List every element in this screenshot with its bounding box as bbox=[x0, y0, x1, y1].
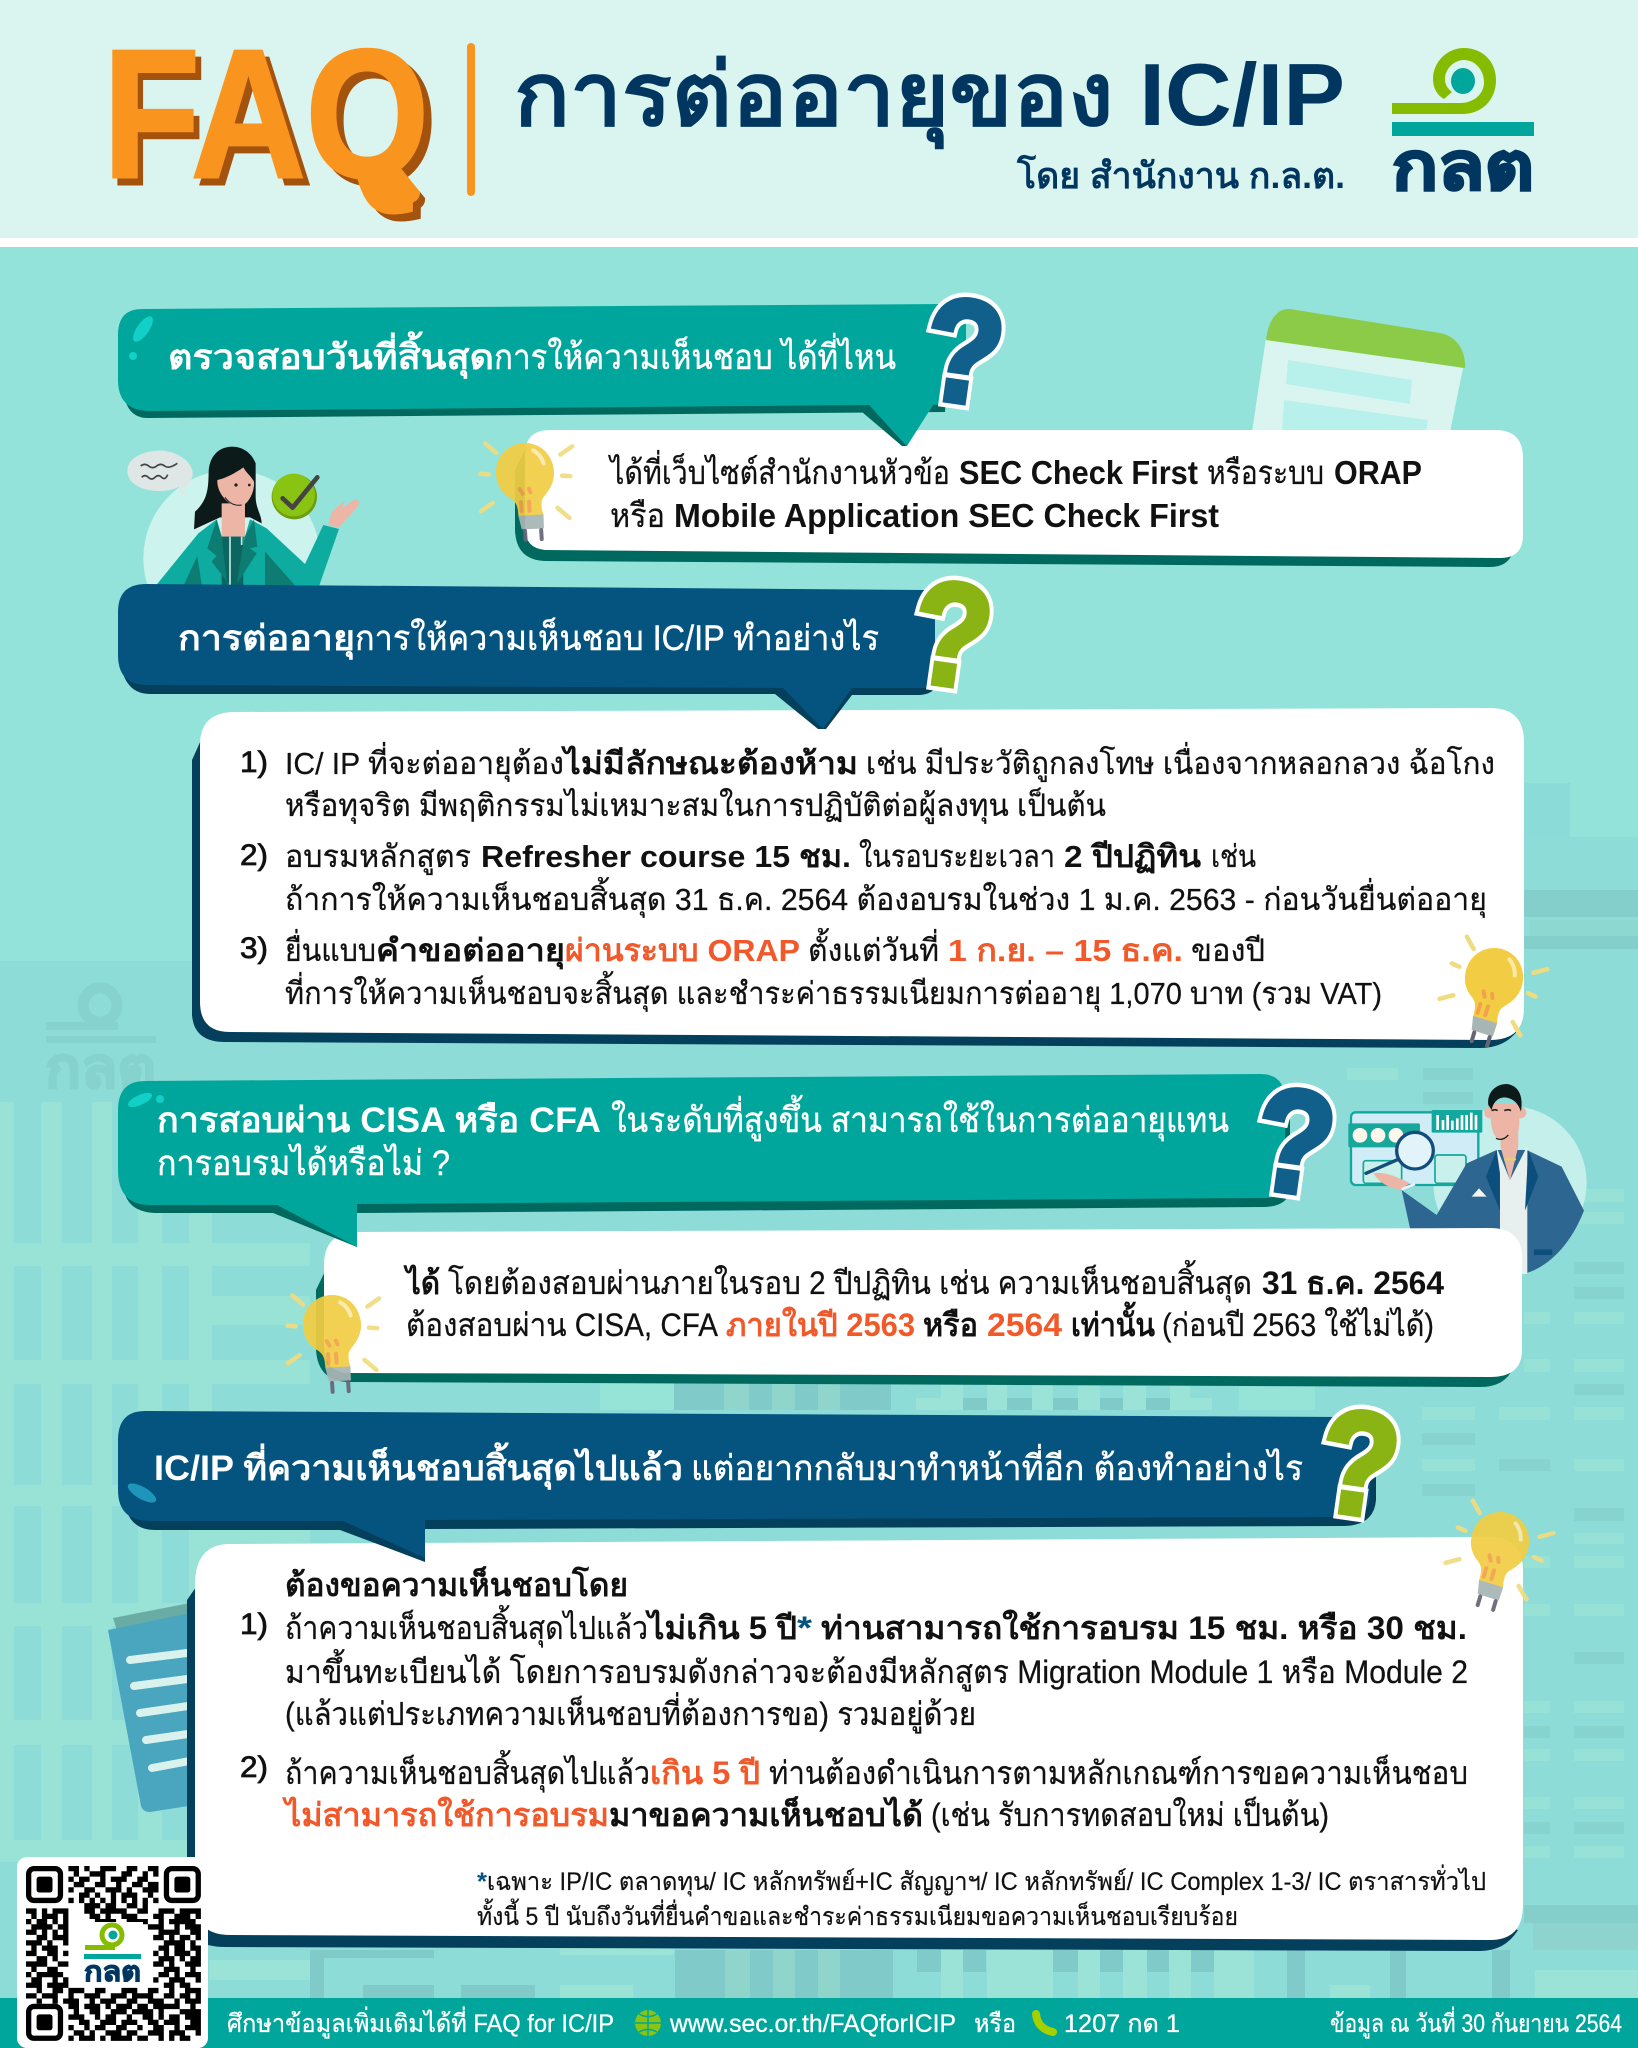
question 1 text: การให้ความเห็นชอบ ได้ที่ไหน bbox=[494, 333, 896, 377]
footer: phone number: 1207 กด 1 bbox=[1064, 2010, 1180, 2038]
step 3 bbox=[240, 928, 1382, 1013]
icon: light bulb bbox=[470, 429, 587, 549]
panel: expired IC/IP answer bbox=[187, 1498, 1556, 1951]
step 2: Refresher course 15 ชม. bbox=[481, 839, 851, 874]
highlight bbox=[129, 313, 157, 360]
answer 3 line 2: ต้องสอบผ่าน CISA, CFA bbox=[406, 1307, 719, 1343]
icon: question mark 4: ? bbox=[1309, 1377, 1409, 1550]
question 1 text: ตรวจสอบวันที่สิ้นสุด bbox=[168, 331, 494, 379]
header band bbox=[0, 0, 1638, 238]
icon: light bulb bbox=[1439, 1498, 1556, 1618]
case 2: 2) bbox=[240, 1751, 268, 1784]
QR centre logo: กลต bbox=[84, 1956, 141, 1987]
answer 3 line 2: (ก่อนปี 2563 ใช้ไม่ได้) bbox=[1162, 1307, 1434, 1343]
step 2: อบรมหลักสูตร bbox=[285, 839, 471, 875]
icon: question mark 2: ? bbox=[902, 548, 1002, 721]
step 2: ถ้าการให้ความเห็นชอบสิ้นสุด 31 ธ.ค. 2564 ต้องอบรมในช่วง 1 ม.ค. 2563 - ก่อนวันยื่นต่ออายุ bbox=[285, 877, 1487, 919]
answer 3 line 1: โดยต้องสอบผ่านภายในรอบ 2 ปีปฏิทิน เช่น ความเห็นชอบสิ้นสุด bbox=[448, 1260, 1252, 1303]
footnote bbox=[477, 1864, 1486, 1931]
title divider bbox=[467, 43, 475, 196]
step 1: ไม่มีลักษณะต้องห้าม bbox=[561, 745, 858, 781]
icon: light bulb bbox=[277, 1281, 394, 1401]
answer 1 line 1: SEC Check First bbox=[959, 454, 1198, 491]
case 1: 1) bbox=[240, 1608, 268, 1641]
case 1: ท่านสามารถใช้การอบรม 15 ชม. หรือ 30 ชม. bbox=[821, 1609, 1467, 1646]
answer 3 line 2: หรือ bbox=[923, 1307, 978, 1343]
answer 1 line 1: ORAP bbox=[1334, 454, 1422, 491]
step 2: ในรอบระยะเวลา bbox=[859, 839, 1055, 874]
case 1 bbox=[240, 1605, 1468, 1734]
step 2: เช่น bbox=[1211, 839, 1256, 874]
question 3 line 2: การอบรมได้หรือไม่ ? bbox=[157, 1143, 450, 1183]
watermark logo: กลต bbox=[45, 1036, 156, 1099]
footer: more info text: ศึกษาข้อมูลเพิ่มเติมได้ที่ FAQ for IC/IP bbox=[227, 2006, 614, 2039]
QR centre logo bbox=[80, 1922, 143, 1987]
watermark logo bbox=[45, 988, 156, 1099]
panel: question 1 bubble bbox=[118, 304, 966, 446]
question 1 text bbox=[168, 331, 896, 379]
answer 1 line 1 bbox=[607, 450, 1422, 491]
step 1: เช่น มีประวัติถูกลงโทษ เนื่องจากหลอกลวง ฉ้อโกง bbox=[866, 742, 1495, 782]
icon: document left bbox=[108, 1602, 195, 1812]
step 1: หรือทุจริต มีพฤติกรรมไม่เหมาะสมในการปฏิบัติต่อผู้ลงทุน เป็นต้น bbox=[285, 787, 1106, 825]
answer 3 line 1: 31 ธ.ค. 2564 bbox=[1262, 1265, 1444, 1301]
step 3: คำขอต่ออายุ bbox=[376, 933, 565, 970]
title: FAQ: FAQ bbox=[103, 11, 429, 216]
QR code bbox=[17, 1857, 208, 2048]
step 3: ผ่านระบบ ORAP bbox=[565, 933, 800, 968]
question 4 text bbox=[154, 1442, 1303, 1490]
footnote: ทั้งนี้ 5 ปี นับถึงวันที่ยื่นคำขอและชำระค่าธรรมเนียมขอความเห็นชอบเรียบร้อย bbox=[477, 1898, 1238, 1931]
step 3: ที่การให้ความเห็นชอบจะสิ้นสุด และชำระค่าธรรมเนียมการต่ออายุ 1,070 บาท (รวม VAT) bbox=[285, 971, 1382, 1013]
panel: steps to renew bbox=[192, 708, 1550, 1054]
answer 1 line 1: หรือระบบ bbox=[1207, 454, 1324, 491]
icon: question mark 3: ? bbox=[1245, 1055, 1345, 1228]
panel: question 4 bubble bbox=[118, 1411, 1376, 1562]
step 1: IC/ IP ที่จะต่ออายุต้อง bbox=[285, 742, 564, 783]
question 3 line 1: ในระดับที่สูงขึ้น สามารถใช้ในการต่ออายุแทน bbox=[611, 1094, 1229, 1141]
panel: question 2 bubble bbox=[118, 584, 938, 729]
step 2: 2) bbox=[240, 839, 268, 872]
case 2: (เช่น รับการทดสอบใหม่ เป็นต้น) bbox=[931, 1796, 1329, 1833]
question 4 text: IC/IP ที่ความเห็นชอบสิ้นสุดไปแล้ว bbox=[154, 1442, 683, 1490]
case 2: ถ้าความเห็นชอบสิ้นสุดไปแล้ว bbox=[285, 1750, 650, 1793]
case 1: ถ้าความเห็นชอบสิ้นสุดไปแล้ว bbox=[285, 1605, 648, 1648]
icon: phone bbox=[1036, 2014, 1053, 2032]
footnote: * bbox=[477, 1868, 487, 1896]
icon: question mark 4: ? bbox=[1309, 1377, 1409, 1550]
question 2 text: การต่ออายุ bbox=[178, 619, 355, 660]
case 1: ไม่เกิน 5 ปี bbox=[645, 1609, 797, 1646]
subtitle: by SEC: โดย สำนักงาน ก.ล.ต. bbox=[1016, 154, 1345, 196]
answer 3 line 1 bbox=[403, 1260, 1444, 1303]
answer 1 line 1: ได้ที่เว็บไซต์สำนักงานหัวข้อ bbox=[607, 450, 950, 491]
bottom band bbox=[209, 1948, 1638, 1998]
step 3: ตั้งแต่วันที่ bbox=[808, 928, 939, 968]
answer 3 line 1: ได้ bbox=[403, 1264, 440, 1301]
step 1 bbox=[240, 742, 1495, 825]
case 2: ไม่สามารถใช้การอบรม bbox=[282, 1796, 609, 1833]
title: FAQ: FAQ bbox=[108, 18, 437, 223]
icon: question mark 2: ? bbox=[902, 548, 1002, 721]
case 2: ท่านต้องดำเนินการตามหลักเกณฑ์การขอความเห็นชอบ bbox=[769, 1754, 1468, 1791]
step 3: 1 ก.ย. – 15 ธ.ค. bbox=[948, 933, 1183, 968]
footnote: เฉพาะ IP/IC ตลาดทุน/ IC หลักทรัพย์+IC สัญญาฯ/ IC หลักทรัพย์/ IC Complex 1-3/ IC ตราสารทั่วไป bbox=[487, 1864, 1486, 1897]
step 1: 1) bbox=[240, 746, 268, 779]
question 3 line 1 bbox=[157, 1094, 1229, 1141]
step 2 bbox=[240, 839, 1487, 919]
icon: light bulb bbox=[1433, 934, 1550, 1054]
step 3: ยื่นแบบ bbox=[285, 929, 376, 968]
step 2: 2 ปีปฏิทิน bbox=[1064, 839, 1201, 874]
logo: SEC Thailand: กลต bbox=[1392, 129, 1534, 203]
case 2: เกิน 5 ปี bbox=[650, 1755, 760, 1791]
icon: question mark 1: ? bbox=[914, 265, 1014, 438]
answer 3 line 2 bbox=[406, 1301, 1434, 1343]
answer 1 line 2: หรือ bbox=[610, 497, 665, 534]
logo: SEC Thailand bbox=[1392, 48, 1534, 203]
icon: document top right bbox=[1252, 309, 1465, 432]
icon: globe bbox=[635, 2010, 661, 2036]
illustration: man with magnifier bbox=[1348, 1084, 1587, 1274]
step 3: ของปี bbox=[1191, 933, 1265, 968]
answer heading: ต้องขอความเห็นชอบโดย bbox=[285, 1565, 628, 1603]
case 1: มาขึ้นทะเบียนได้ โดยการอบรมดังกล่าวจะต้องมีหลักสูตร Migration Module 1 หรือ Module 2 bbox=[285, 1649, 1468, 1692]
answer 3 line 2: ภายในปี 2563 bbox=[726, 1306, 915, 1343]
title: การต่ออายุของ IC/IP: การต่ออายุของ IC/IP bbox=[514, 45, 1345, 150]
question 2 text: การให้ความเห็นชอบ IC/IP ทำอย่างไร bbox=[355, 617, 879, 658]
highlight bbox=[126, 1090, 164, 1110]
case 1: * bbox=[797, 1610, 813, 1646]
icon: question mark 3: ? bbox=[1245, 1055, 1345, 1228]
answer 1 line 2: Mobile Application SEC Check First bbox=[674, 497, 1219, 534]
answer 3 line 2: 2564 bbox=[987, 1307, 1062, 1343]
question 3 line 1: การสอบผ่าน CISA หรือ CFA bbox=[157, 1101, 601, 1140]
band between answer 3 and question 4 bbox=[600, 1380, 1315, 1410]
illustration: woman with check mark bbox=[127, 447, 360, 647]
question 2 text bbox=[178, 617, 879, 660]
question 4 text: แต่อยากกลับมาทำหน้าที่อีก ต้องทำอย่างไร bbox=[691, 1444, 1303, 1488]
footer: website: www.sec.or.th/FAQforICIP bbox=[669, 2010, 956, 2038]
panel: answer 1 bbox=[470, 429, 1523, 567]
step 3: 3) bbox=[240, 932, 268, 965]
icon: question mark 1: ? bbox=[914, 265, 1014, 438]
case 2 bbox=[240, 1750, 1468, 1833]
right column bars bbox=[1347, 1068, 1624, 1858]
panel: question 3 bubble bbox=[118, 1074, 1290, 1247]
footer: or: หรือ bbox=[974, 2010, 1016, 2038]
panel: CISA/CFA answer bbox=[277, 1228, 1522, 1401]
highlight bbox=[125, 1480, 159, 1506]
footer bar bbox=[0, 1998, 1638, 2048]
case 2: มาขอความเห็นชอบได้ bbox=[609, 1795, 923, 1833]
answer 3 line 2: เท่านั้น bbox=[1071, 1301, 1155, 1343]
case 1: (แล้วแต่ประเภทความเห็นชอบที่ต้องการขอ) รวมอยู่ด้วย bbox=[285, 1692, 976, 1734]
